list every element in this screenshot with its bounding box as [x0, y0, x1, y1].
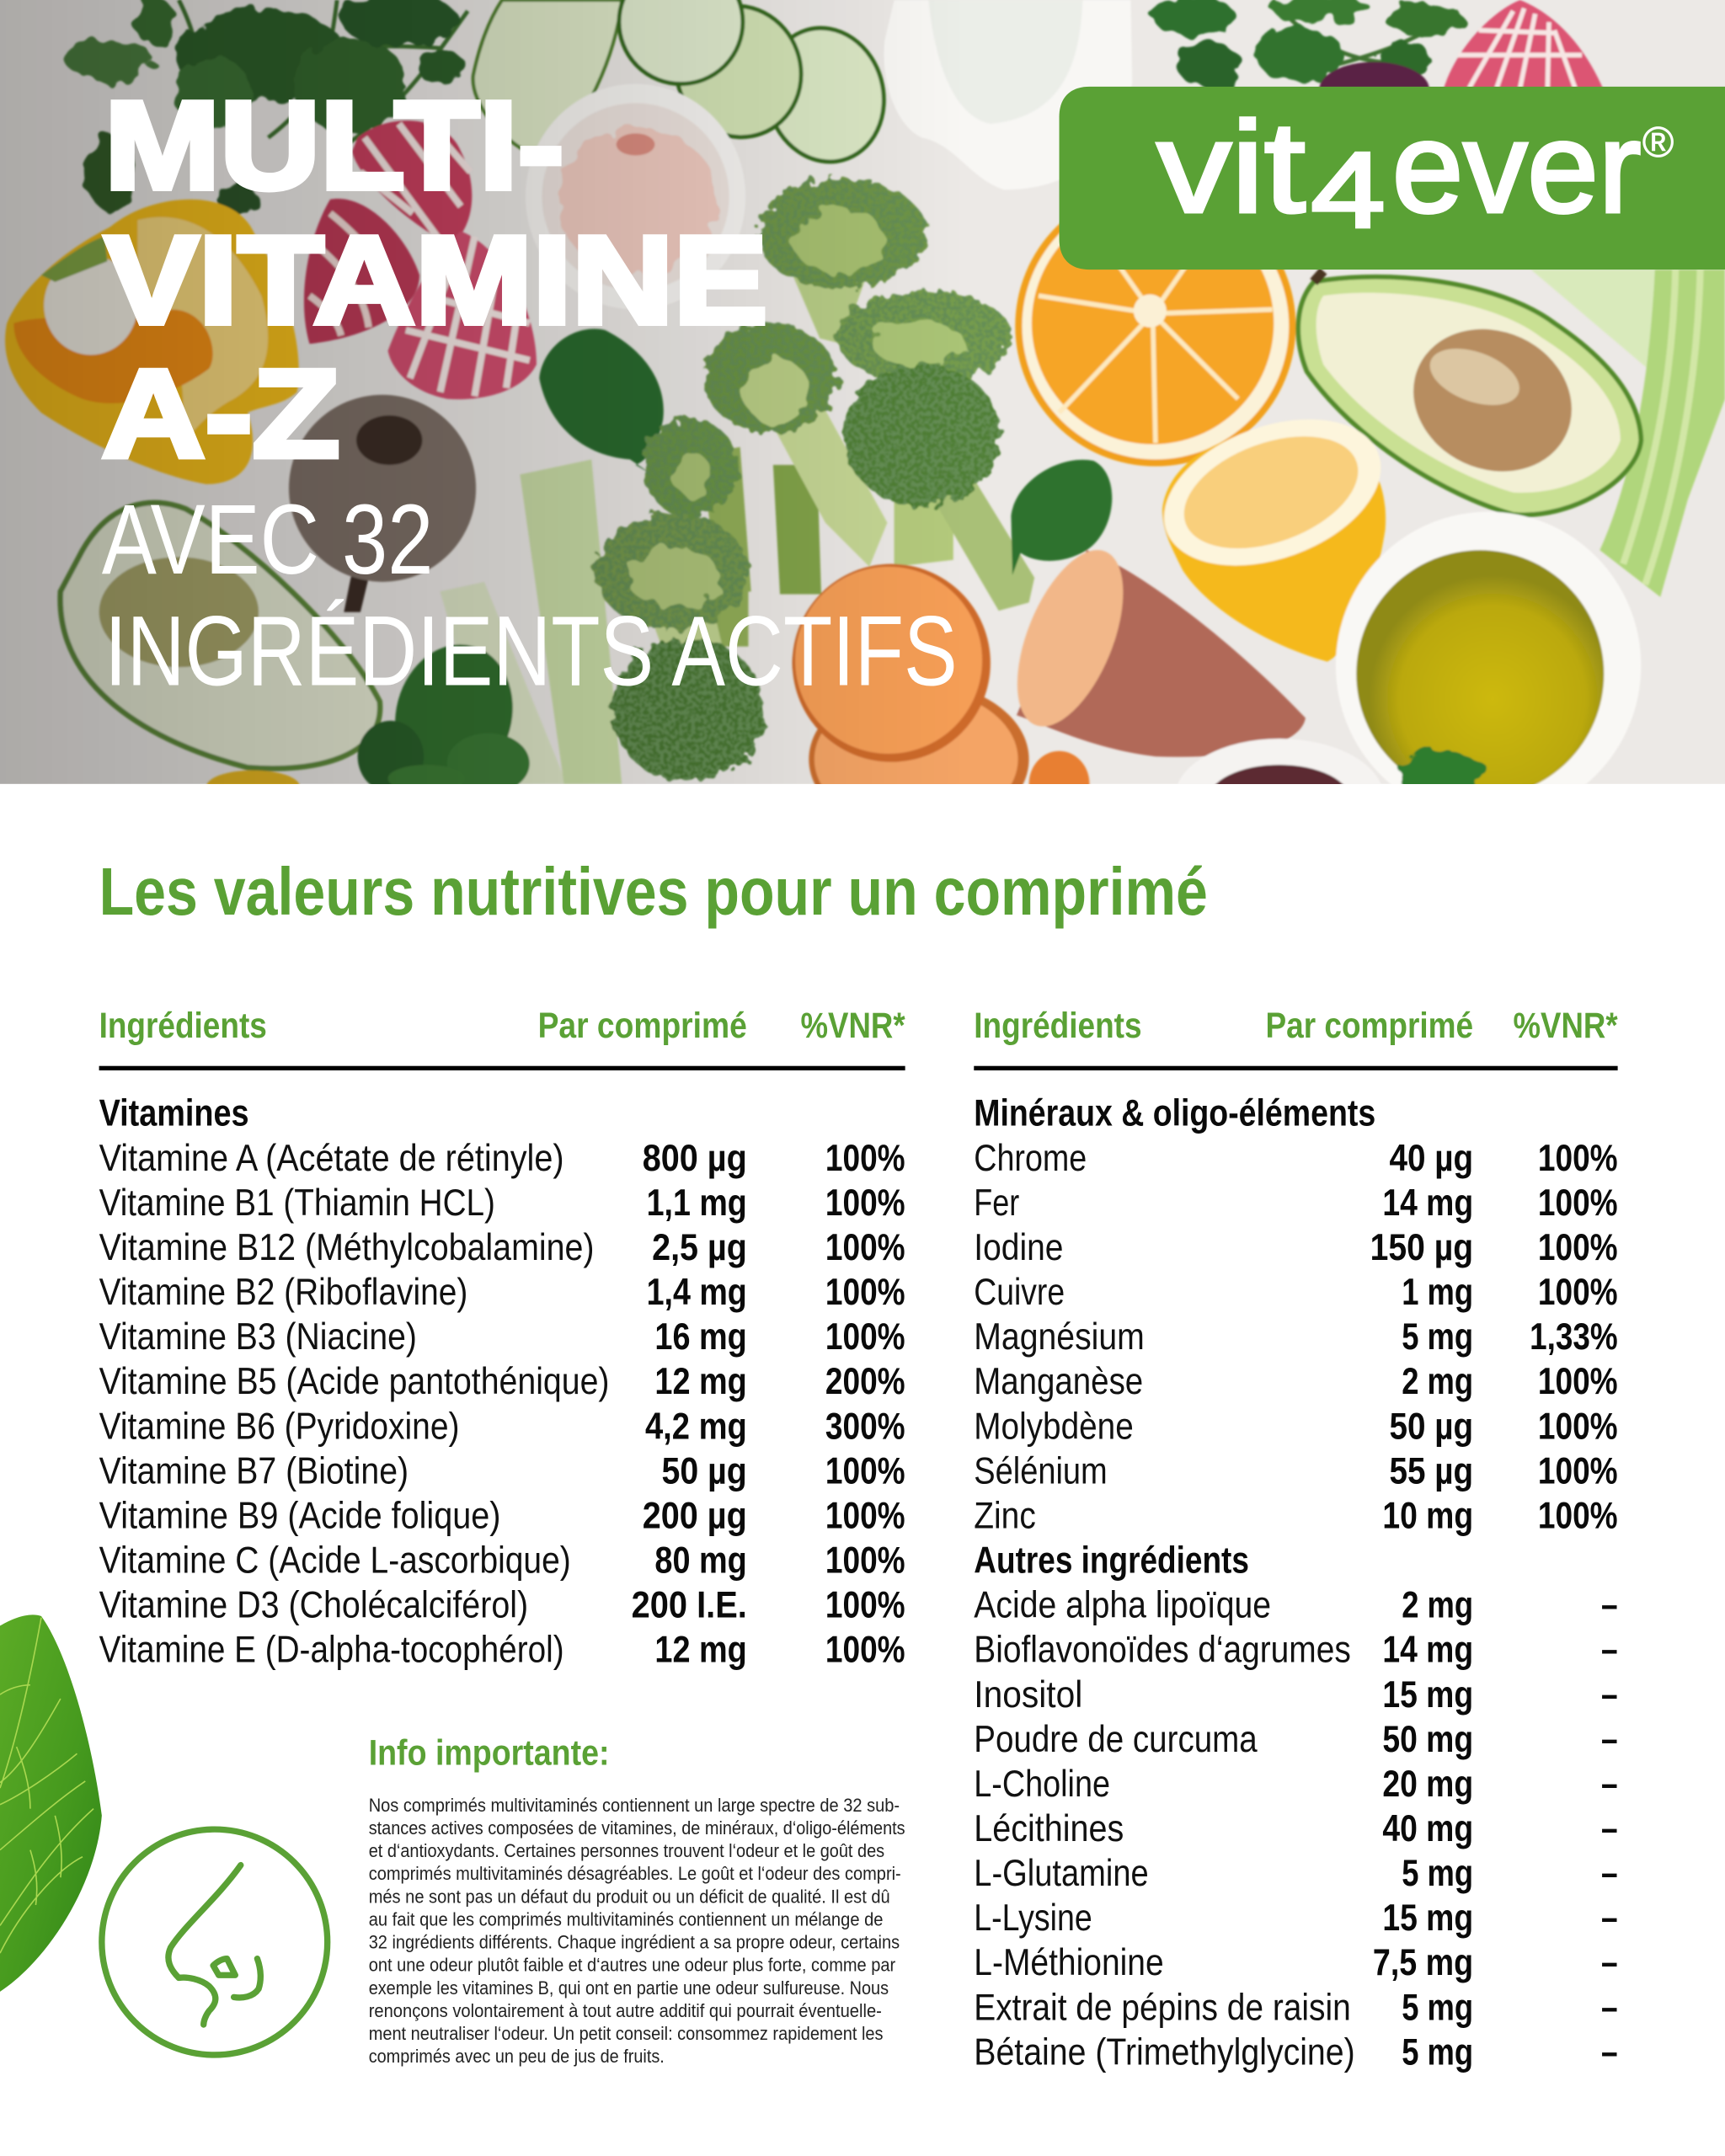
row: l-glutamine: L-Glutamine [974, 1853, 1149, 1894]
column headers left: Par comprimé [538, 1006, 747, 1045]
info paragraph: ment neutraliser l‘odeur. Un petit conseil: consommez rapidement les [369, 2023, 883, 2044]
row: vitamin C: 80 mg [654, 1540, 747, 1582]
row: chrome [974, 1138, 1618, 1179]
lemon [1144, 392, 1401, 662]
info paragraph: renonçons volontairement à tout autre additif qui pourrait éventuelle- [369, 2000, 882, 2021]
row: l-glutamine: 5 mg [1402, 1853, 1473, 1894]
row: molybdene: 50 µg [1390, 1406, 1473, 1447]
row: lecithins [974, 1808, 1618, 1849]
row: selenium: 100% [1538, 1450, 1618, 1492]
main title: INGRÉDIENTS ACTIFS [104, 595, 958, 706]
row: vitamin B1 [99, 1182, 905, 1224]
row: manganese: 2 mg [1402, 1361, 1473, 1402]
right avocado [1298, 271, 1641, 515]
row: betaine: 5 mg [1402, 2031, 1473, 2073]
row: fer: 100% [1538, 1182, 1618, 1224]
white jug [884, 0, 1132, 189]
row: l-choline: 20 mg [1382, 1764, 1473, 1805]
row: inositol: Inositol [974, 1674, 1082, 1716]
row: l-methionine [974, 1942, 1618, 1983]
row: vitamin B7: 100% [825, 1450, 905, 1492]
row: vitamin B6 [99, 1406, 905, 1447]
row: manganese: Manganèse [974, 1361, 1143, 1402]
main title: A-Z [102, 344, 339, 483]
row: inositol [974, 1674, 1618, 1716]
cucumber long piece [473, 0, 622, 159]
row: vitamin B1: 1,1 mg [647, 1182, 747, 1224]
brand badge: vit4ever: ever [1392, 95, 1641, 240]
row: vitamin C [99, 1540, 905, 1582]
spinach leaf right [1011, 460, 1112, 575]
info block [369, 1732, 905, 2067]
row: selenium: Sélénium [974, 1450, 1108, 1492]
row: alpha lipoic acid: 2 mg [1402, 1585, 1473, 1626]
row: vitamin C: Vitamine C (Acide L-ascorbique) [99, 1540, 571, 1582]
main title: AVEC 32 [102, 484, 433, 595]
row: vitamin A: 100% [825, 1138, 905, 1179]
row: bioflavonoids [974, 1630, 1618, 1671]
row: l-lysine [974, 1897, 1618, 1939]
info paragraph: 32 ingrédients différents. Chaque ingrédient a sa propre odeur, certains [369, 1932, 900, 1953]
row: inositol: 15 mg [1382, 1674, 1473, 1716]
row: iodine [974, 1227, 1618, 1268]
row: molybdene [974, 1406, 1618, 1447]
row: molybdene: 100% [1538, 1406, 1618, 1447]
row: alpha lipoic acid: Acide alpha lipoïque [974, 1585, 1271, 1626]
info paragraph: ont une odeur plutôt faible et d‘autres une odeur plus forte, comme par [369, 1955, 896, 1976]
brand badge: vit4ever [1060, 87, 1725, 270]
column headers left: %VNR* [801, 1006, 905, 1045]
info paragraph: comprimés avec un peu de jus de fruits. [369, 2046, 665, 2067]
row: iodine: 100% [1538, 1227, 1618, 1268]
column headers right: %VNR* [1513, 1006, 1618, 1045]
row: alpha lipoic acid [974, 1585, 1618, 1626]
row: vitamin B12 [99, 1227, 905, 1268]
olive oil bowl [1336, 512, 1641, 819]
row: vitamin B2 [99, 1272, 905, 1313]
row: bioflavonoids: Bioflavonoïdes d‘agrumes [974, 1630, 1351, 1671]
row: vitamin D3: Vitamine D3 (Cholécalciférol) [99, 1585, 528, 1626]
info paragraph: Nos comprimés multivitaminés contiennent un large spectre de 32 sub- [369, 1795, 900, 1816]
row: chrome: 100% [1538, 1138, 1618, 1179]
row: vitamin B9: Vitamine B9 (Acide folique) [99, 1495, 500, 1536]
spinach bottom left [356, 643, 531, 784]
row: vitamin D3 [99, 1585, 905, 1626]
row: vitamin B2: Vitamine B2 (Riboflavine) [99, 1272, 467, 1313]
row: molybdene: Molybdène [974, 1406, 1134, 1447]
main title: VITAMINE [104, 211, 767, 350]
row: vitamin B9 [99, 1495, 905, 1536]
row: turmeric powder: 50 mg [1382, 1719, 1473, 1760]
brand badge: vit4ever: 4 [1311, 130, 1386, 249]
info paragraph: stances actives composées de vitamines, de minéraux, d‘oligo-éléments [369, 1817, 905, 1838]
decorative green leaf [0, 1614, 102, 1992]
row: vitamin E: 100% [825, 1630, 905, 1671]
group title: minerals: Minéraux & oligo-éléments [974, 1093, 1375, 1134]
row: zinc: 100% [1538, 1495, 1618, 1536]
row: vitamin E: 12 mg [654, 1630, 747, 1671]
info heading: Info importante: [369, 1732, 609, 1772]
row: zinc: Zinc [974, 1495, 1036, 1536]
orange half [1014, 222, 1297, 468]
row: vitamin B3: 100% [825, 1316, 905, 1358]
row: vitamin C: 100% [825, 1540, 905, 1582]
row: manganese: 100% [1538, 1361, 1618, 1402]
cucumber slices [619, 0, 899, 175]
row: lecithins: – [1601, 1808, 1618, 1849]
row: vitamin B7: 50 µg [662, 1450, 747, 1492]
column headers left: Ingrédients [99, 1006, 267, 1045]
row: l-choline [974, 1764, 1618, 1805]
striped beets [304, 120, 537, 399]
row: zinc [974, 1495, 1618, 1536]
row: vitamin B1: 100% [825, 1182, 905, 1224]
dark overlay [0, 0, 1725, 784]
row: l-methionine: – [1601, 1942, 1618, 1983]
celery strip left [441, 582, 567, 784]
spinach leaf centre [539, 328, 664, 474]
info paragraph [369, 1795, 905, 2067]
parsley top right [1153, 0, 1462, 88]
row: magnesium: 1,33% [1530, 1316, 1618, 1358]
row: vitamin B6: 300% [825, 1406, 905, 1447]
row: l-choline: – [1601, 1764, 1618, 1805]
row: vitamin B3: Vitamine B3 (Niacine) [99, 1316, 417, 1358]
info paragraph: et d‘antioxydants. Certaines personnes trouvent l‘odeur et le goût des [369, 1840, 884, 1861]
row: grape seed extract: 5 mg [1402, 1987, 1473, 2028]
table: vitamins [99, 1006, 905, 1671]
sweet potato [1016, 549, 1307, 758]
row: lecithins: Lécithines [974, 1808, 1124, 1849]
brand badge: vit4ever: ® [1642, 118, 1674, 166]
row: vitamin D3: 100% [825, 1585, 905, 1626]
group title: vitamines: Vitamines [99, 1093, 249, 1134]
row: selenium [974, 1450, 1618, 1492]
row: betaine: – [1601, 2031, 1618, 2073]
main title: MULTI- [104, 76, 564, 216]
row: vitamin B7 [99, 1450, 905, 1492]
row: vitamin B12: Vitamine B12 (Méthylcobalamine) [99, 1227, 595, 1268]
row: vitamin A [99, 1138, 905, 1179]
row: cuivre: Cuivre [974, 1272, 1065, 1313]
celery centre [520, 459, 622, 784]
column headers right: Par comprimé [1266, 1006, 1473, 1045]
row: turmeric powder: Poudre de curcuma [974, 1719, 1258, 1760]
row: betaine: Bétaine (Trimethylglycine) [974, 2031, 1355, 2073]
info paragraph: au fait que les comprimés multivitaminés contiennent un mélange de [369, 1908, 883, 1929]
row: zinc: 10 mg [1382, 1495, 1473, 1536]
row: vitamin B3: 16 mg [654, 1316, 747, 1358]
info paragraph: exemple les vitamines B, qui ont en partie une odeur sulfureuse. Nous [369, 1977, 889, 1999]
row: vitamin B5: 12 mg [654, 1361, 747, 1402]
row: iodine: 150 µg [1370, 1227, 1473, 1268]
sweet potato slices [793, 564, 1089, 836]
row: lecithins: 40 mg [1382, 1808, 1473, 1849]
row: vitamin E: Vitamine E (D-alpha-tocophérol) [99, 1630, 564, 1671]
row: vitamin B12: 100% [825, 1227, 905, 1268]
row: turmeric powder: – [1601, 1719, 1618, 1760]
row: l-lysine: – [1601, 1897, 1618, 1939]
row: l-glutamine: – [1601, 1853, 1618, 1894]
row: l-lysine: L-Lysine [974, 1897, 1092, 1939]
row: vitamin B3 [99, 1316, 905, 1358]
row: l-methionine: 7,5 mg [1373, 1942, 1473, 1983]
column headers left [99, 1006, 905, 1070]
icon: nose in circle [102, 1829, 328, 2055]
row: cuivre: 1 mg [1402, 1272, 1473, 1313]
row: vitamin E [99, 1630, 905, 1671]
row: alpha lipoic acid: – [1601, 1585, 1618, 1626]
row: grape seed extract: Extrait de pépins de raisin [974, 1987, 1351, 2028]
row: grape seed extract [974, 1987, 1618, 2028]
row: l-methionine: L-Méthionine [974, 1942, 1164, 1983]
info paragraph: comprimés multivitaminés désagréables. Le goût et l‘odeur des compri- [369, 1863, 901, 1884]
right celery [1531, 270, 1725, 597]
row: fer [974, 1182, 1618, 1224]
row: bioflavonoids: 14 mg [1382, 1630, 1473, 1671]
row: vitamin B6: Vitamine B6 (Pyridoxine) [99, 1406, 459, 1447]
row: vitamin B5: Vitamine B5 (Acide pantothénique) [99, 1361, 609, 1402]
table: minerals and other ingredients [974, 1006, 1618, 2073]
row: vitamin B12: 2,5 µg [652, 1227, 747, 1268]
row: cuivre [974, 1272, 1618, 1313]
row: vitamin A: Vitamine A (Acétate de rétinyle) [99, 1138, 564, 1179]
yellow pepper piece at bottom [206, 771, 300, 803]
row: vitamin B6: 4,2 mg [645, 1406, 747, 1447]
row: vitamin B7: Vitamine B7 (Biotine) [99, 1450, 409, 1492]
small bean bowl [1175, 739, 1384, 857]
yellow pepper [5, 200, 299, 484]
column headers right [974, 1006, 1618, 1070]
row: fer: 14 mg [1382, 1182, 1473, 1224]
parsley bottom right [1395, 751, 1488, 795]
row: vitamin D3: 200 I.E. [632, 1585, 747, 1626]
row: vitamin B1: Vitamine B1 (Thiamin HCL) [99, 1182, 495, 1224]
row: vitamin B2: 1,4 mg [647, 1272, 747, 1313]
row: bioflavonoids: – [1601, 1630, 1618, 1671]
row: magnesium [974, 1316, 1618, 1358]
row: vitamin A: 800 µg [643, 1138, 747, 1179]
row: l-lysine: 15 mg [1382, 1897, 1473, 1939]
row: betaine [974, 2031, 1618, 2073]
hero photo: vegetables and fruit [0, 0, 1725, 857]
row: turmeric powder [974, 1719, 1618, 1760]
row: vitamin B9: 200 µg [643, 1495, 747, 1536]
group title: other ingredients: Autres ingrédients [974, 1540, 1249, 1582]
brand badge: vit4ever: vit [1156, 95, 1306, 240]
row: magnesium: 5 mg [1402, 1316, 1473, 1358]
row: vitamin B9: 100% [825, 1495, 905, 1536]
info paragraph: més ne sont pas un défaut du produit ou un déficit de qualité. Il est dû [369, 1886, 890, 1907]
section heading: Les valeurs nutritives pour un comprimé [99, 854, 1208, 929]
salt bowl [526, 84, 745, 309]
row: chrome: 40 µg [1390, 1138, 1473, 1179]
row: inositol: – [1601, 1674, 1618, 1716]
row: vitamin B5: 200% [825, 1361, 905, 1402]
column headers right: Ingrédients [974, 1006, 1142, 1045]
row: selenium: 55 µg [1390, 1450, 1473, 1492]
row: magnesium: Magnésium [974, 1316, 1145, 1358]
main title [102, 76, 958, 706]
row: cuivre: 100% [1538, 1272, 1618, 1313]
row: manganese [974, 1361, 1618, 1402]
row: l-glutamine [974, 1853, 1618, 1894]
row: fer: Fer [974, 1182, 1019, 1224]
brown beet [289, 395, 476, 612]
broccoli cluster [595, 179, 1034, 782]
row: l-choline: L-Choline [974, 1764, 1110, 1805]
row: grape seed extract: – [1601, 1987, 1618, 2028]
row: iodine: Iodine [974, 1227, 1063, 1268]
row: chrome: Chrome [974, 1138, 1087, 1179]
red striped beet top right and dark beet [1319, 0, 1604, 117]
left avocado half [61, 503, 380, 769]
row: vitamin B2: 100% [825, 1272, 905, 1313]
parsley top left [66, 0, 467, 216]
